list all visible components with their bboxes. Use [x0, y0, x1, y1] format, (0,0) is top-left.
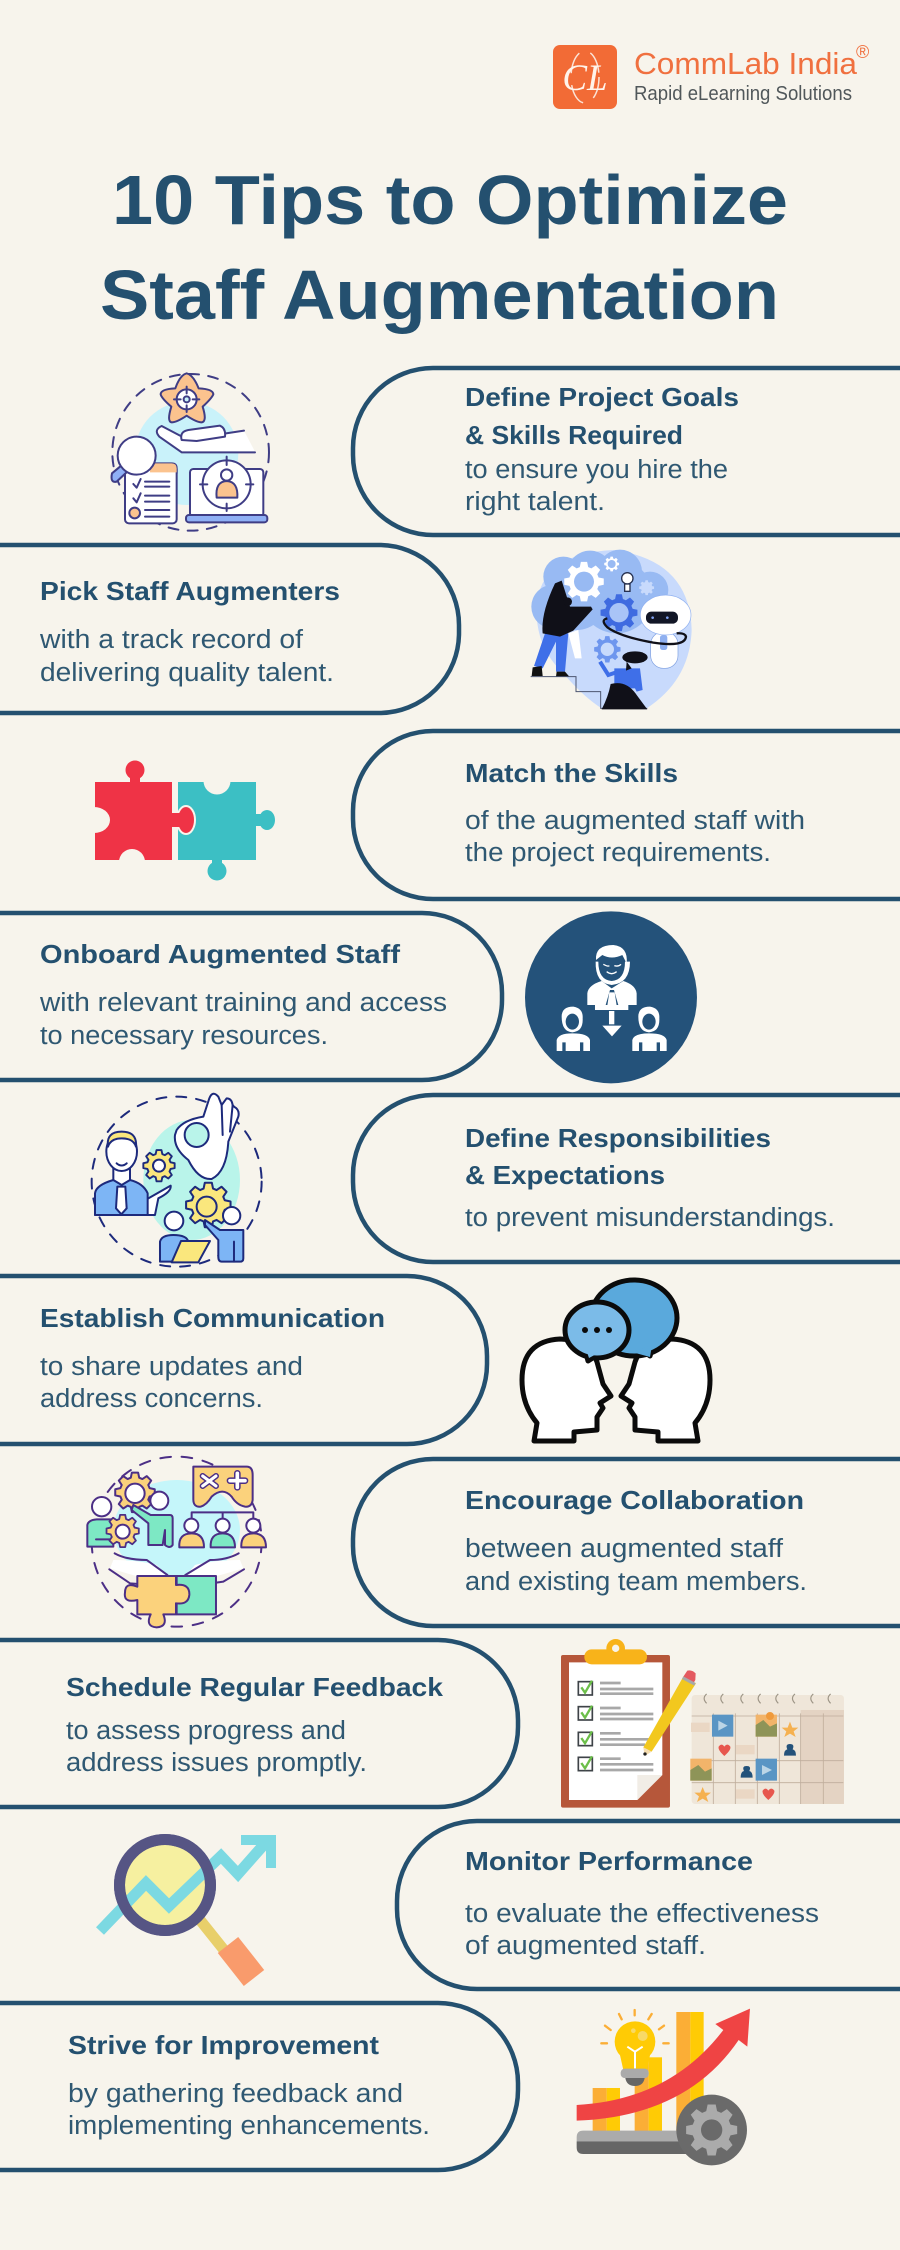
puzzle connector [170, 806, 195, 834]
base [577, 2131, 693, 2154]
body text: to necessary resources. [40, 1022, 328, 1050]
heading: Pick Staff Augmenters [40, 576, 340, 606]
tagline: Rapid eLearning Solutions [634, 83, 852, 105]
body text: by gathering feedback and [68, 2080, 403, 2108]
heading: Strive for Improvement [68, 2030, 379, 2060]
calendar [690, 1694, 844, 1804]
panel: tip 7 encourage collaboration [353, 1459, 900, 1626]
heading: Schedule Regular Feedback [66, 1672, 444, 1702]
pill outline [353, 368, 900, 535]
body text: with a track record of [39, 626, 304, 654]
heading [465, 1123, 771, 1190]
body text [68, 2080, 430, 2140]
body text: the project requirements. [465, 839, 771, 867]
left head [522, 1339, 611, 1441]
trend arrow [100, 1840, 268, 1931]
light bulb [601, 2010, 669, 2086]
icon: collaboration with puzzle [87, 1457, 266, 1627]
pill outline [397, 1821, 900, 1989]
body text: of the augmented staff with [465, 807, 805, 835]
body text: to ensure you hire the [465, 456, 728, 484]
bars [593, 2012, 704, 2131]
teal puzzle piece [178, 782, 275, 880]
heading: & Skills Required [465, 420, 683, 450]
growth arrow [577, 2009, 750, 2121]
body text [39, 626, 334, 687]
body text [66, 1717, 367, 1777]
title: Staff Augmentation [100, 256, 779, 334]
heading: & Expectations [465, 1160, 665, 1190]
small speech bubble [565, 1302, 629, 1361]
title [100, 161, 788, 334]
panel: tip 4 onboard augmented staff [0, 913, 502, 1080]
panel: tip 6 establish communication [0, 1276, 487, 1444]
panel: tip 1 define project goals [353, 368, 900, 535]
heading: Establish Communication [40, 1303, 385, 1333]
body text: with relevant training and access [39, 989, 447, 1017]
body text: between augmented staff [465, 1535, 784, 1563]
body text [465, 807, 805, 867]
panel: tip 9 monitor performance [397, 1821, 900, 1989]
icon: clipboard and calendar [561, 1639, 844, 1808]
icon: magnifier over trend line [100, 1835, 276, 1978]
registered mark: ® [856, 42, 869, 62]
heading [465, 382, 739, 450]
body text [465, 1900, 819, 1960]
body text: address concerns. [40, 1385, 263, 1413]
panel: tip 8 schedule regular feedback [0, 1640, 518, 1807]
pill outline [0, 913, 502, 1080]
panel: tip 2 pick staff augmenters [0, 545, 459, 713]
heading: Onboard Augmented Staff [40, 939, 400, 969]
pill outline [0, 1276, 487, 1444]
icon: growth chart with bulb and gear [577, 2009, 750, 2165]
body text: to evaluate the effectiveness [465, 1900, 819, 1928]
pill outline [353, 1095, 900, 1262]
icon: puzzle pieces [78, 760, 275, 880]
heading: Monitor Performance [465, 1846, 753, 1876]
icon: two heads with speech bubbles [522, 1280, 710, 1441]
pencil [643, 1670, 696, 1756]
icon: leader and team circle [525, 911, 697, 1083]
body text: to prevent misunderstandings. [465, 1204, 835, 1232]
body text [39, 989, 447, 1050]
heading: Match the Skills [465, 758, 678, 788]
icon: team with OK hand [92, 1094, 262, 1267]
logo mark: CL [562, 58, 608, 99]
body text: of augmented staff. [465, 1932, 706, 1960]
panel: tip 3 match the skills [353, 731, 900, 899]
magnifier handle [200, 1920, 254, 1978]
brand name: CommLab India [634, 46, 858, 81]
body text: and existing team members. [465, 1568, 807, 1596]
body text: implementing enhancements. [68, 2112, 430, 2140]
pill outline [0, 1640, 518, 1807]
body text: delivering quality talent. [40, 659, 334, 687]
panel: tip 10 strive for improvement [0, 2003, 518, 2170]
dots [582, 1327, 612, 1333]
pill outline [0, 2003, 518, 2170]
body text: address issues promptly. [66, 1749, 367, 1777]
body text: to share updates and [40, 1353, 303, 1381]
icon: talent search [112, 373, 269, 531]
pill outline [353, 1459, 900, 1626]
logo: CommLab India [553, 42, 869, 109]
clipboard [561, 1639, 670, 1808]
red puzzle piece [95, 760, 172, 860]
body text [465, 1535, 807, 1596]
right head [621, 1339, 710, 1441]
logo mark [553, 45, 617, 109]
panel: tip 5 define responsibilities [353, 1095, 900, 1262]
large speech bubble [591, 1280, 677, 1357]
body text [465, 456, 728, 516]
heading: Define Responsibilities [465, 1123, 771, 1153]
pill outline [0, 545, 459, 713]
title: 10 Tips to Optimize [112, 161, 788, 239]
gear [676, 2095, 747, 2165]
heading: Define Project Goals [465, 382, 739, 412]
icon: people and robot with gears [531, 550, 692, 709]
body text: right talent. [465, 488, 605, 516]
body text [40, 1353, 303, 1413]
body text: to assess progress and [66, 1717, 346, 1745]
pill outline [353, 731, 900, 899]
heading: Encourage Collaboration [465, 1485, 804, 1515]
